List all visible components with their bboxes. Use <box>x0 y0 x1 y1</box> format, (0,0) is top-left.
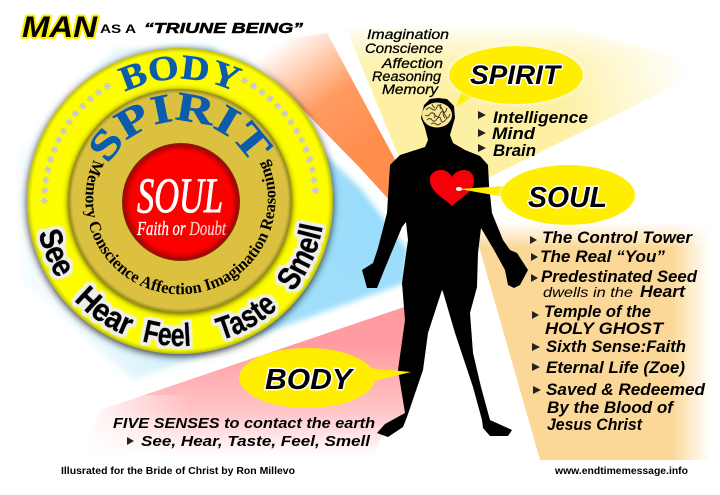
spirit attributes list: Mind <box>492 124 536 143</box>
heading: SPIRIT: SPIRIT <box>90 92 274 162</box>
spirit functions list: Conscience <box>365 40 443 56</box>
pink background wedge <box>98 307 405 450</box>
tan background wedge <box>470 220 715 460</box>
spirit functions list: Imagination <box>367 26 449 42</box>
soul attributes list: Jesus Christ <box>547 415 643 434</box>
callout: spirit <box>449 46 583 107</box>
credit: Illusrated for the Bride of Christ by Ron Millevo <box>61 466 295 477</box>
spirit attributes list <box>478 108 588 160</box>
spirit functions list: Reasoning <box>372 68 441 84</box>
soul attributes list: Sixth Sense:Faith <box>546 337 686 356</box>
body senses text: See, Hear, Taste, Feel, Smell <box>141 433 371 450</box>
body senses text: FIVE SENSES to contact the earth <box>113 415 375 432</box>
senses: Taste <box>210 294 280 342</box>
spirit functions list <box>365 26 449 97</box>
spirit functions list: Memory <box>382 81 439 97</box>
title <box>22 11 304 44</box>
heart dot <box>456 187 462 191</box>
soul attributes list: Saved & Redeemed <box>546 380 706 399</box>
spirit functions ring text: Memory Conscience Affection Imagination Reasoning <box>82 159 276 294</box>
spirit attributes list: Brain <box>493 141 536 160</box>
callout: soul <box>459 165 635 225</box>
icon: heart <box>430 170 474 206</box>
soul attributes list <box>530 228 706 434</box>
senses: Hear <box>71 281 138 338</box>
stars right: ✱✱✱✱✱✱✱✱✱✱✱✱✱✱ <box>240 77 320 194</box>
circle: spirit ring <box>68 89 292 313</box>
spirit functions list: Affection <box>381 55 443 71</box>
callout: soul: SOUL <box>528 182 607 214</box>
yellow background wedge <box>347 15 720 177</box>
soul attributes list: HOLY GHOST <box>545 319 665 338</box>
senses: Feel <box>139 316 194 350</box>
senses: Smell <box>274 220 326 294</box>
soul label: SOUL <box>137 167 223 223</box>
circle: body ring <box>27 48 333 354</box>
circle: soul <box>122 143 240 261</box>
heading: BODY: BODY <box>117 55 243 92</box>
diagram: concentric circles <box>20 44 340 362</box>
soul attributes list: The Control Tower <box>542 228 693 247</box>
senses: See <box>36 225 74 280</box>
website: www.endtimemessage.info <box>554 466 688 477</box>
human silhouette <box>362 98 528 437</box>
blue background wedge <box>17 46 408 380</box>
spirit attributes list: Intelligence <box>493 108 588 127</box>
soul attributes list: dwells in the <box>543 284 633 300</box>
soul attributes list: Eternal Life (Zoe) <box>546 358 685 377</box>
soul attributes list: Heart <box>640 282 686 301</box>
soul attributes list: Predestinated Seed <box>541 267 698 286</box>
icon: brain <box>422 102 452 128</box>
senses <box>36 220 326 350</box>
soul attributes list: Temple of the <box>544 302 651 321</box>
title: MAN <box>22 11 98 44</box>
soul attributes list: By the Blood of <box>547 398 675 417</box>
orange background wedge <box>240 33 398 203</box>
stars left: ✱✱✱✱✱✱✱✱✱✱✱✱✱✱ <box>40 82 111 204</box>
title: “TRIUNE BEING” <box>144 20 304 37</box>
title: AS A <box>100 22 136 36</box>
callout: spirit: SPIRIT <box>470 60 563 90</box>
callout: body <box>239 348 411 408</box>
soul attributes list: The Real “You” <box>540 247 665 266</box>
body senses text <box>113 415 375 450</box>
callout: body: BODY <box>265 364 355 396</box>
faith or doubt: Faith or Doubt <box>136 218 226 240</box>
